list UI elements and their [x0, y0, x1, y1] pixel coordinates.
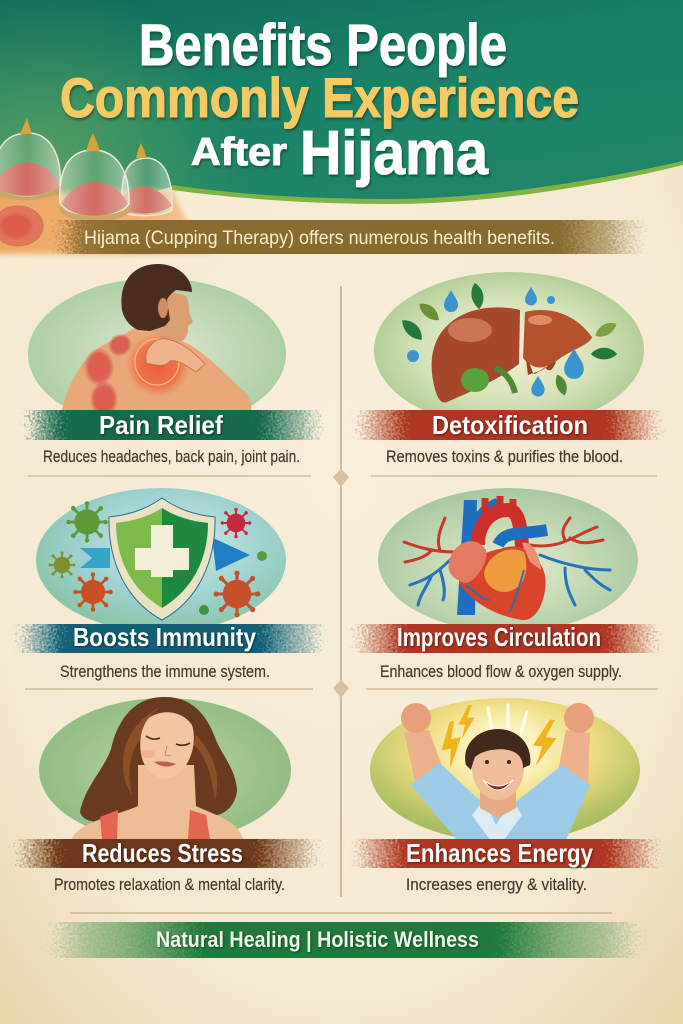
- vertical divider: [340, 286, 342, 897]
- banner: detoxification: [358, 410, 658, 440]
- banner: reduces stress: Reduces Stress: [82, 838, 243, 868]
- banner: pain relief: [28, 410, 320, 440]
- title: Commonly Experience: [60, 66, 579, 129]
- cup 3: [122, 143, 172, 216]
- description: Enhances blood flow & oxygen supply.: [380, 662, 622, 681]
- description: Increases energy & vitality.: [406, 875, 587, 894]
- title: Hijama: [300, 119, 488, 188]
- skin area with cupping marks: [0, 190, 212, 254]
- panel: improves circulation: [356, 488, 656, 681]
- row dividers: [25, 469, 658, 698]
- cup 1: [0, 118, 60, 200]
- intro banner: Hijama (Cupping Therapy) offers numerous health benefits.: [84, 228, 555, 249]
- panel: detoxification: [358, 272, 658, 466]
- banner: improves circulation: Improves Circulation: [397, 622, 601, 652]
- intro banner: [58, 220, 643, 254]
- banner: boosts immunity: Boosts Immunity: [73, 622, 256, 652]
- panel: reduces stress: [18, 697, 316, 894]
- illustration: heart with vessels: [378, 488, 638, 632]
- banner: pain relief: Pain Relief: [99, 410, 223, 440]
- icon: glass cups: [0, 118, 172, 222]
- footer banner: Natural Healing | Holistic Wellness: [156, 927, 479, 952]
- banner: detoxification: Detoxification: [432, 410, 588, 440]
- illustration: shield with viruses: [36, 488, 286, 632]
- description: Promotes relaxation & mental clarity.: [54, 875, 285, 894]
- panel: pain relief: [28, 264, 320, 466]
- cup 2: [58, 133, 131, 222]
- description: Strengthens the immune system.: [60, 662, 270, 681]
- header banner: [0, 0, 683, 204]
- panel: boosts immunity: [20, 488, 322, 681]
- description: Removes toxins & purifies the blood.: [386, 447, 623, 466]
- title: [60, 13, 579, 188]
- title: Benefits People: [139, 13, 507, 78]
- illustration: relaxed woman: [39, 697, 291, 842]
- illustration: man with shoulder pain: [28, 264, 286, 430]
- banner: reduces stress: [18, 838, 316, 868]
- panel: enhances energy: [356, 697, 656, 894]
- banner: boosts immunity: [20, 622, 322, 653]
- title: After: [191, 131, 287, 174]
- description: Reduces headaches, back pain, joint pain.: [43, 447, 300, 466]
- banner: enhances energy: Enhances Energy: [406, 838, 593, 868]
- footer banner: [52, 922, 638, 958]
- illustration: liver with drops and leaves: [374, 272, 644, 428]
- illustration: cheering man: [370, 697, 640, 842]
